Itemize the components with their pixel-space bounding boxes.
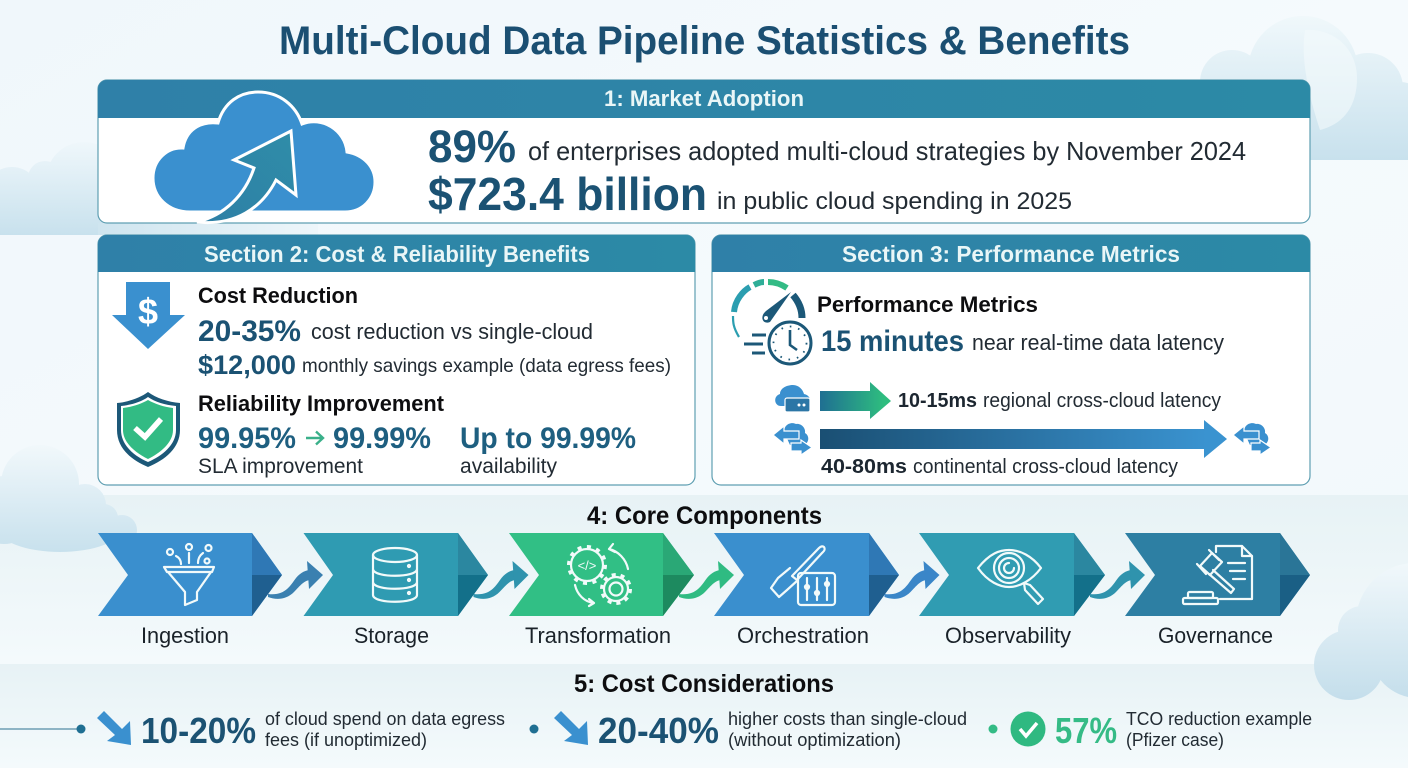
stat: data egress: of cloud spend on data egress — [265, 708, 505, 729]
block: reliability improvement: Reliability Improvement — [198, 391, 444, 416]
arrow: orchestration to observability — [884, 561, 940, 599]
arrow: continental latency — [820, 420, 1227, 458]
icon: green check circle — [1010, 712, 1046, 746]
stat: public cloud spending — [428, 168, 1072, 220]
block: availability: availability — [460, 454, 557, 478]
block: performance metrics text — [817, 292, 1224, 358]
icon: down-right arrow — [97, 711, 131, 745]
icon: gears with code — [569, 544, 630, 606]
arrow: transformation to orchestration — [679, 561, 734, 599]
label: observability: Observability — [945, 623, 1071, 648]
label: regional latency: 10-15ms — [898, 390, 977, 412]
heading: core components: 4: Core Components — [587, 502, 822, 530]
icon: baton and mixer — [771, 546, 835, 605]
icon: gears with code: </> — [578, 558, 596, 573]
background cloud: top right highlight — [1304, 30, 1357, 130]
step: orchestration — [714, 533, 899, 648]
stat: public cloud spending: $723.4 billion — [428, 168, 707, 220]
block: reliability improvement: 99.99% — [333, 422, 431, 455]
arrow: storage to transformation — [474, 561, 528, 599]
band: core components background — [0, 495, 1408, 664]
step: governance — [1125, 533, 1310, 648]
label: continental latency: 40-80ms — [821, 456, 907, 478]
stat: tco reduction: TCO reduction example — [1126, 708, 1312, 729]
background cloud: middle left — [0, 142, 122, 235]
block: reliability improvement: 99.95% — [198, 422, 296, 455]
block: reliability improvement — [198, 391, 444, 478]
label: continental latency: continental cross-cloud latency — [913, 456, 1178, 478]
block: performance metrics text: Performance Metrics — [817, 292, 1038, 317]
block: reliability improvement: SLA improvement — [198, 454, 363, 478]
stat: 89% adoption — [428, 121, 1246, 172]
label: storage: Storage — [354, 623, 429, 648]
stat: tco reduction — [988, 708, 1312, 751]
block: performance metrics text: near real-time data latency — [972, 330, 1224, 355]
icon: gauge and clock — [733, 282, 811, 364]
block: cost reduction: Cost Reduction — [198, 283, 358, 308]
label: transformation: Transformation — [525, 623, 671, 648]
stat: 89% adoption: of enterprises adopted multi-cloud strategies by November 2024 — [528, 136, 1246, 166]
heading: section 2: Section 2: Cost & Reliability Benefits — [204, 241, 590, 267]
block: cost reduction: 20-35% — [198, 315, 301, 348]
background cloud: bottom right — [1314, 563, 1408, 700]
block: performance metrics text: 15 minutes — [821, 325, 964, 358]
stat: 89% adoption: 89% — [428, 121, 516, 172]
label: orchestration: Orchestration — [737, 623, 869, 648]
block: cost reduction: monthly savings example (data egress fees) — [302, 355, 671, 377]
icon: eye and magnifier — [978, 550, 1043, 604]
icon: down-right arrow — [554, 711, 588, 745]
stat: data egress: 10-20% — [141, 710, 256, 751]
stat: tco reduction: 57% — [1055, 710, 1117, 751]
heading: market adoption: 1: Market Adoption — [604, 86, 804, 111]
panel: market adoption — [98, 80, 1310, 223]
title: Multi-Cloud Data Pipeline Statistics & Benefits — [279, 19, 1130, 63]
block: availability — [460, 422, 636, 478]
label: regional latency: regional cross-cloud latency — [983, 390, 1221, 412]
stat: higher costs — [530, 708, 967, 751]
panel: cost and reliability benefits — [98, 235, 695, 485]
background cloud: top right — [1199, 16, 1408, 160]
icon: cloud with rising arrow — [153, 92, 375, 223]
icon: cross-cloud sync left — [773, 423, 812, 455]
step: storage — [304, 533, 488, 648]
background strip between panels — [98, 223, 318, 235]
heading: cost considerations: 5: Cost Considerations — [574, 670, 834, 698]
block: cost reduction — [198, 283, 671, 380]
icon: cloud server — [775, 385, 810, 412]
stat: higher costs: higher costs than single-cloud — [728, 708, 967, 729]
block: cost reduction: cost reduction vs single-cloud — [311, 319, 593, 344]
background cloud: lower left — [0, 445, 137, 552]
stat: data egress — [0, 708, 505, 751]
icon: dollar down arrow — [112, 282, 185, 349]
icon: cross-cloud sync right — [1233, 423, 1271, 455]
block: cost reduction: $12,000 — [198, 350, 296, 380]
arrow: ingestion to storage — [268, 561, 323, 599]
step: transformation — [509, 533, 694, 648]
icon: green shield with check — [117, 392, 180, 467]
icon: funnel — [164, 544, 214, 605]
band: cost considerations background — [0, 664, 1408, 768]
arrow: observability to governance — [1090, 561, 1145, 599]
stat: tco reduction: (Pfizer case) — [1126, 729, 1224, 750]
label: ingestion: Ingestion — [141, 623, 229, 648]
stat: higher costs: (without optimization) — [728, 729, 901, 750]
heading: section 3: Section 3: Performance Metrics — [842, 241, 1180, 267]
panel: performance metrics — [712, 235, 1310, 485]
stat: public cloud spending: in public cloud spending in 2025 — [717, 188, 1072, 215]
label: governance: Governance — [1158, 623, 1273, 648]
icon: gavel and document — [1183, 546, 1252, 604]
step: ingestion — [98, 533, 282, 648]
stat: higher costs: 20-40% — [598, 710, 719, 751]
arrow: regional latency — [820, 382, 891, 419]
icon: dollar down arrow: $ — [138, 291, 158, 332]
step: observability — [919, 533, 1105, 648]
stat: data egress: fees (if unoptimized) — [265, 729, 427, 750]
icon: database — [373, 548, 417, 602]
block: availability: Up to 99.99% — [460, 422, 636, 455]
